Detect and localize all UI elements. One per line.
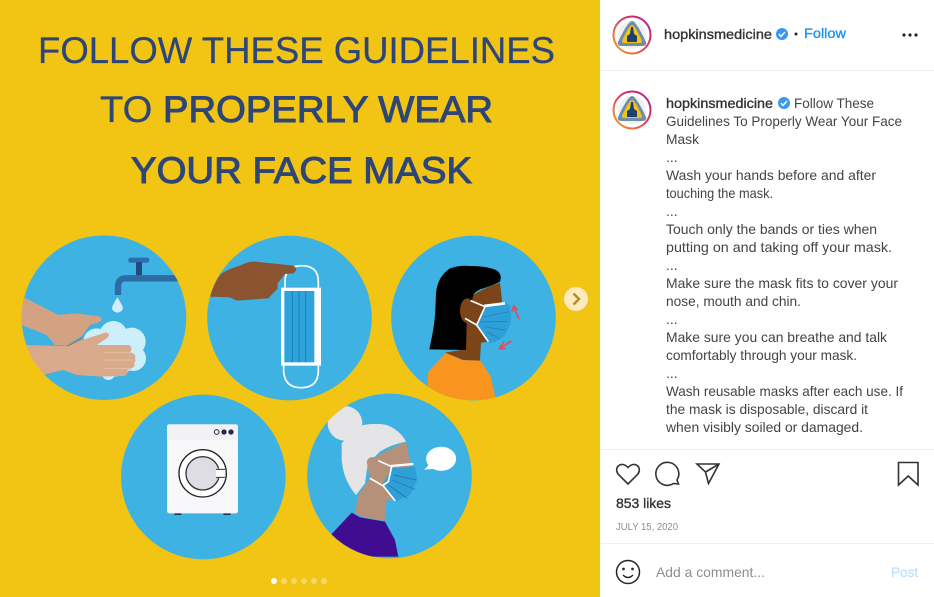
post header [614,16,918,54]
comment placeholder: Add a comment... [656,564,765,580]
caption text: Mask [666,131,700,147]
icon: bookmark [898,462,918,485]
icon: elderly woman talking [307,394,472,558]
icon: avatar [614,16,650,54]
icon: washing machine [121,395,286,559]
caption text: ... [666,311,678,327]
title: TO PROPERLY WEAR [100,89,493,130]
caption text: Guidelines To Properly Wear Your Face [666,113,902,129]
icon: washing hands [20,235,186,400]
caption text: when visibly soiled or damaged. [665,419,863,435]
caption text: Touch only the bands or ties when [666,221,877,237]
action icons [617,462,918,485]
caption text: Make sure you can breathe and talk [666,329,888,345]
icon: mask fit profile [391,236,556,400]
caption [614,92,903,435]
carousel dots [271,578,327,584]
panel: yellow slide [0,0,600,597]
follow link: Follow [804,25,847,41]
icon: touching mask bands [207,236,372,400]
post button: Post [891,564,918,580]
title [38,30,555,191]
caption text: the mask is disposable, discard it [666,401,868,417]
panel: post sidebar [600,0,934,597]
likes count: 853 likes [616,495,671,511]
caption text: ... [666,365,678,381]
caption text: putting on and taking off your mask. [666,239,892,255]
icon: next arrow button [564,287,588,311]
caption text: touching the mask. [666,185,773,201]
icon: smiley [616,560,640,584]
account name: hopkinsmedicine [664,26,772,42]
caption text: hopkinsmedicine [666,95,773,111]
date: JULY 15, 2020 [616,522,678,533]
caption text: ... [666,257,678,273]
icon: comment [656,462,679,485]
icon: heart [617,464,639,484]
comment box [616,560,918,584]
caption text: Follow These [794,95,874,111]
title: YOUR FACE MASK [131,150,472,191]
caption text: Make sure the mask fits to cover your [666,275,898,291]
icon: verified badge [776,28,788,40]
icon: more options [902,33,918,37]
caption text [665,95,903,435]
icon: share [697,464,719,484]
caption text: ... [666,203,678,219]
caption text: Wash your hands before and after [666,167,876,183]
icon: caption avatar [614,92,650,128]
caption text: comfortably through your mask. [666,347,857,363]
title: FOLLOW THESE GUIDELINES [38,30,555,71]
caption text: nose, mouth and chin. [666,293,801,309]
caption text: ... [666,149,678,165]
caption text: Wash reusable masks after each use. If [666,383,903,399]
